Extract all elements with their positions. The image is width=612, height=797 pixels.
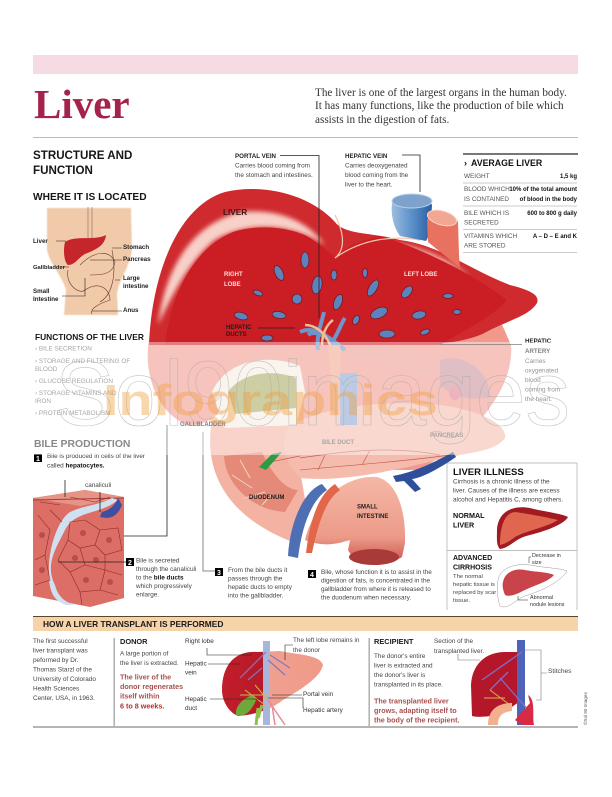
body location diagram: Stomach xyxy=(123,244,149,251)
hepatic artery callout: Carries xyxy=(525,358,546,365)
donor liver illustration xyxy=(185,637,360,725)
hepatic artery callout: coming from xyxy=(525,386,560,394)
step 4: digestion of fats, is concentrated in the xyxy=(321,578,431,584)
step 1: 1 xyxy=(36,456,40,463)
average liver table: 600 to 800 g daily xyxy=(527,211,578,217)
recipient liver illustration xyxy=(458,640,572,725)
tissue leader lines xyxy=(58,425,167,562)
donor liver illustration: Portal vein xyxy=(303,691,334,698)
central vessels xyxy=(300,312,345,350)
hepatic vein callout: liver to the heart. xyxy=(345,182,393,188)
watermark orange text: Infographics xyxy=(103,376,438,425)
average liver table: IS CONTAINED xyxy=(464,196,509,203)
lower lobe xyxy=(148,300,511,470)
average liver table: BLOOD WHICH xyxy=(464,186,510,193)
recipient text: transplanted liver. xyxy=(434,648,484,655)
panel: liver illness xyxy=(447,463,577,610)
recipient text xyxy=(374,637,484,724)
average liver table: WEIGHT xyxy=(464,173,490,180)
canaliculi label: canaliculi xyxy=(85,482,111,489)
step 3: passes through the xyxy=(228,576,283,582)
step 2: which progressively xyxy=(135,583,193,590)
panel: liver illness: liver. Causes of the illness are excess xyxy=(453,488,560,494)
recipient liver illustration: Stitches xyxy=(548,668,572,675)
average liver table: SECRETED xyxy=(464,220,499,226)
hepatic vein callout: Carries deoxygenated xyxy=(345,162,408,170)
step 1 xyxy=(34,453,146,470)
donor liver illustration: vein xyxy=(185,670,197,676)
recipient text: transplanted in its place. xyxy=(374,682,443,688)
step 2: to the bile ducts xyxy=(136,574,184,582)
functions of the liver: IRON xyxy=(35,398,51,405)
average liver table: BILE WHICH IS xyxy=(464,210,509,217)
intro text: The liver is one of the largest organs in the human body. xyxy=(315,87,567,99)
hepatic artery callout: the heart. xyxy=(525,396,552,403)
average liver table: VITAMINS WHICH xyxy=(464,233,518,240)
organ labels: DUCTS xyxy=(226,332,247,338)
panel: liver illness: Decrease in xyxy=(532,553,561,559)
first transplant text: The first successful xyxy=(33,638,88,645)
hepatic artery callout: oxygenated xyxy=(525,368,558,374)
functions of the liver: › STORAGE VITAMINS AND xyxy=(35,390,117,397)
step 4 xyxy=(308,569,432,602)
step 2: through the canaliculi xyxy=(136,566,196,573)
donor text: DONOR xyxy=(120,637,148,646)
step 2: 2 xyxy=(128,560,132,567)
hepatic vein stump xyxy=(392,194,432,241)
main illustration: digestive organs xyxy=(148,300,511,565)
portal vein callout: the stomach and intestines. xyxy=(235,172,313,179)
hepatic vein callout: blood coming from the xyxy=(345,172,409,179)
heading: structure and function: STRUCTURE AND xyxy=(33,149,132,162)
body location diagram: Gallbladder xyxy=(33,265,66,271)
panel: liver illness: The normal xyxy=(453,574,483,580)
donor liver illustration: duct xyxy=(185,705,197,712)
hepatic vein callout: HEPATIC VEIN xyxy=(345,153,388,160)
body location diagram: Small xyxy=(33,288,50,295)
copyright: ©Sol 90 Images xyxy=(582,692,588,725)
functions of the liver: FUNCTIONS OF THE LIVER xyxy=(35,332,144,342)
step 2: enlarge. xyxy=(136,592,159,598)
recipient text: the body of the recipient. xyxy=(374,716,459,724)
step 1: Bile is produced in cells of the liver xyxy=(47,453,146,460)
recipient text: liver is extracted and xyxy=(374,662,433,670)
donor text: the liver is extracted. xyxy=(120,660,179,667)
organ labels: RIGHT xyxy=(224,272,243,278)
panel: liver illness: NORMAL xyxy=(453,511,485,520)
first transplant text: Health Sciences xyxy=(33,686,79,692)
step 3: hepatic ducts to empty xyxy=(228,584,293,591)
average liver table: 10% of the total amount xyxy=(509,187,577,193)
average liver table: ARE STORED xyxy=(464,242,506,250)
intro text xyxy=(315,87,567,126)
average liver table xyxy=(463,153,578,252)
first transplant text: liver transplant was xyxy=(33,648,88,654)
portal vein callout: PORTAL VEIN xyxy=(235,153,277,160)
donor liver illustration: The left lobe remains in xyxy=(293,637,360,644)
recipient text: The transplanted liver xyxy=(374,696,449,706)
functions of the liver: BLOOD xyxy=(35,366,58,373)
panel: liver illness: size xyxy=(532,560,542,566)
heading: structure and function: FUNCTION xyxy=(33,164,93,177)
first transplant text: Thomas Starzl of the xyxy=(33,666,92,674)
step 3: 3 xyxy=(217,570,221,577)
heading: structure and function xyxy=(33,149,132,177)
hepatic artery callout xyxy=(525,338,560,403)
duodenum xyxy=(210,420,306,541)
hepatic artery callout: HEPATIC xyxy=(525,338,552,345)
first transplant text: Center, USA, in 1963. xyxy=(33,695,95,702)
step 4: 4 xyxy=(310,572,314,579)
step 2 xyxy=(126,558,196,598)
organ labels: GALLBLADDER xyxy=(180,422,226,428)
organ labels: HEPATIC xyxy=(226,325,252,331)
main illustration: liver xyxy=(149,189,538,350)
average liver table: A – D – E and K xyxy=(533,234,578,240)
transplant header band: HOW A LIVER TRANSPLANT IS PERFORMED xyxy=(43,619,223,629)
donor liver illustration: Hepatic artery xyxy=(303,707,344,714)
liver upper rim xyxy=(149,189,538,345)
falciform ligament xyxy=(335,215,420,258)
heading: where it is located: WHERE IT IS LOCATED xyxy=(33,192,147,203)
panel: liver illness: LIVER xyxy=(453,520,475,530)
first transplant text: peformed by Dr. xyxy=(33,657,79,664)
donor text: A large portion of xyxy=(120,650,169,658)
organ labels: SMALL xyxy=(357,504,378,510)
portal vein callout xyxy=(235,153,313,179)
donor liver illustration: Hepatic xyxy=(185,660,207,668)
rim highlight left xyxy=(158,211,325,325)
organ labels: LEFT LOBE xyxy=(404,272,437,278)
organ labels: INTESTINE xyxy=(357,514,388,520)
panel: liver illness: alcohol and Hepatitis C, among others. xyxy=(453,496,563,504)
transplant header band xyxy=(33,616,578,631)
average liver table: AVERAGE LIVER xyxy=(471,158,543,168)
panel: liver illness: hepatic tissue is xyxy=(453,582,495,588)
pancreas vein xyxy=(393,452,456,492)
organ labels: LIVER xyxy=(223,208,247,217)
panel: liver illness: replaced by scar xyxy=(453,590,496,596)
panel: liver illness: Cirrhosis is a chronic illness of the xyxy=(453,478,550,486)
step 4: Bile, whose function it is to assist in the xyxy=(321,569,432,576)
panel: liver illness: nodule lesions xyxy=(530,602,565,608)
donor text: donor regenerates xyxy=(120,682,183,691)
title: Liver xyxy=(34,81,130,127)
pancreas xyxy=(284,403,505,479)
body location diagram xyxy=(33,207,151,315)
body location diagram: Large xyxy=(123,275,140,282)
intro text: It has many functions, like the production of bile which xyxy=(315,100,564,112)
functions of the liver: › STORAGE AND FILTERING OF xyxy=(35,358,130,365)
normal liver xyxy=(497,507,568,549)
body location diagram: Liver xyxy=(33,238,48,245)
first transplant text xyxy=(33,638,96,702)
body location diagram: intestine xyxy=(123,283,149,290)
average liver table: of blood in the body xyxy=(520,197,578,203)
functions of the liver: › BILE SECRETION xyxy=(35,346,92,352)
step 3: From the bile ducts it xyxy=(228,567,288,574)
panel: liver illness: tissue. xyxy=(453,598,470,604)
donor text: 6 to 8 weeks. xyxy=(120,702,164,710)
watermark outline text: Sol90images xyxy=(55,343,570,445)
donor liver illustration: Hepatic xyxy=(185,696,207,703)
front face xyxy=(165,227,507,345)
recipient text: the donor's liver is xyxy=(374,672,425,679)
average liver table: 1,5 kg xyxy=(560,174,577,180)
portal vein callout: Carries blood coming from xyxy=(235,162,310,170)
average liver table: › xyxy=(464,158,467,168)
step 3: into the gallbladder. xyxy=(228,592,284,600)
recipient text: Section of the xyxy=(434,638,474,645)
hepatic artery callout: ARTERY xyxy=(525,348,551,355)
first transplant text: University of Colorado xyxy=(33,676,96,683)
panel: liver illness: ADVANCED xyxy=(453,555,492,562)
step 4: gallbladder from where it is released to xyxy=(321,586,431,593)
liver tissue block xyxy=(33,490,124,607)
green bile duct arrow xyxy=(259,452,282,470)
hepatic vein callout xyxy=(345,153,409,188)
step 3 xyxy=(215,567,293,600)
donor text: itself within xyxy=(120,692,160,700)
rim highlight right xyxy=(345,243,470,275)
bile production heading: BILE PRODUCTION xyxy=(34,439,130,450)
vessel openings xyxy=(233,252,461,341)
recipient text: RECIPIENT xyxy=(374,637,414,646)
cirrhotic liver xyxy=(497,565,567,607)
artery stump xyxy=(427,213,460,268)
panel: liver illness: LIVER ILLNESS xyxy=(453,467,524,478)
body location diagram: Anus xyxy=(123,307,139,314)
gallbladder and hilum xyxy=(212,345,490,428)
functions of the liver xyxy=(35,332,144,417)
panel: liver illness: CIRRHOSIS xyxy=(453,564,492,572)
hepatic artery callout: blood xyxy=(525,377,541,384)
step 2: Bile is secreted xyxy=(136,558,180,564)
donor liver illustration: Right lobe xyxy=(185,638,214,645)
top colour bar xyxy=(33,55,578,74)
body location diagram: Pancreas xyxy=(123,256,151,263)
organ labels: BILE DUCT xyxy=(322,440,354,446)
watermark band xyxy=(0,342,612,455)
donor text: The liver of the xyxy=(120,672,171,682)
organ labels: PANCREAS xyxy=(430,433,463,439)
donor liver illustration: the donor xyxy=(293,647,321,654)
body location diagram: Intestine xyxy=(33,296,59,303)
organ labels: DUODENUM xyxy=(249,495,284,501)
small intestine xyxy=(305,477,405,564)
intro text: assists in the digestion of fats. xyxy=(315,114,449,126)
step 4: the duodenum when necessary. xyxy=(321,594,411,602)
panel: liver illness: Abnormal xyxy=(530,595,553,601)
donor text xyxy=(120,637,183,710)
recipient text: grows, adapting itself to xyxy=(374,706,457,715)
functions of the liver: › PROTEIN METABOLISM xyxy=(35,410,111,417)
organ labels xyxy=(180,208,463,520)
step 1: called hepatocytes. xyxy=(47,462,105,470)
mesenteric vessels xyxy=(288,484,327,558)
functions of the liver: › GLUCOSE REGULATION xyxy=(35,378,113,385)
recipient text: The donor's entire xyxy=(374,653,426,660)
organ labels: LOBE xyxy=(224,282,241,288)
